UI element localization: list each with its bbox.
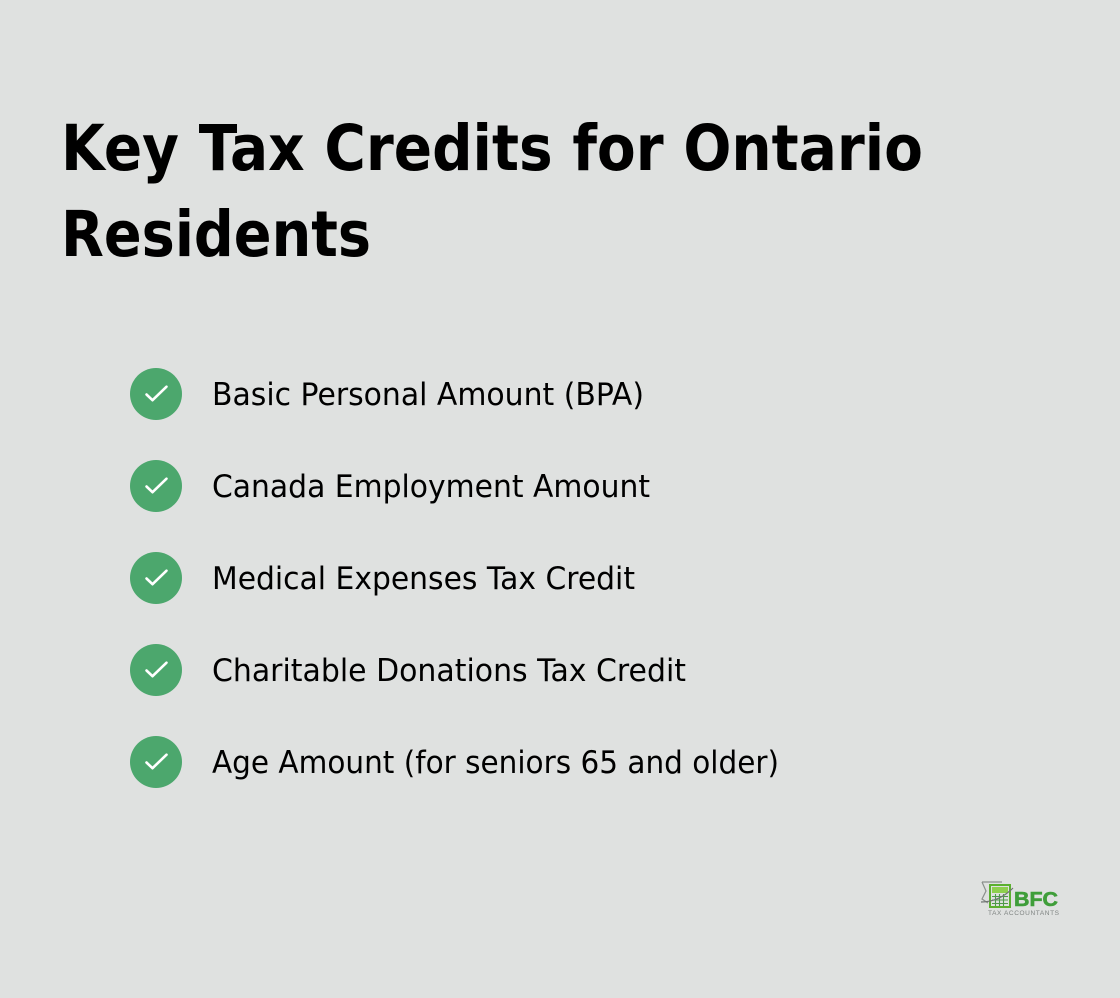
logo: BFC Tax Accountants (981, 882, 1060, 917)
item: Canada Employment Amount: Canada Employment Amount (212, 469, 650, 505)
item: Charitable Donations Tax Credit: Charitable Donations Tax Credit (212, 653, 686, 689)
item: Age Amount: Age Amount (for seniors 65 and older) (212, 745, 779, 781)
icon: calculator (981, 882, 1013, 907)
logo: BFC Tax Accountants: BFC (1014, 889, 1058, 911)
item: Basic Personal Amount: Basic Personal Amount (BPA) (212, 377, 644, 413)
title: Residents (61, 198, 371, 271)
title (61, 112, 923, 271)
title: Key Tax Credits for Ontario (61, 112, 923, 185)
item: Age Amount (130, 736, 779, 788)
logo: BFC Tax Accountants: TAX ACCOUNTANTS (988, 910, 1060, 917)
checklist (130, 368, 779, 788)
item: Medical Expenses Tax Credit: Medical Expenses Tax Credit (212, 561, 635, 597)
item: Medical Expenses Tax Credit (130, 552, 635, 604)
item: Canada Employment Amount (130, 460, 650, 512)
item: Basic Personal Amount (130, 368, 644, 420)
item: Charitable Donations Tax Credit (130, 644, 686, 696)
